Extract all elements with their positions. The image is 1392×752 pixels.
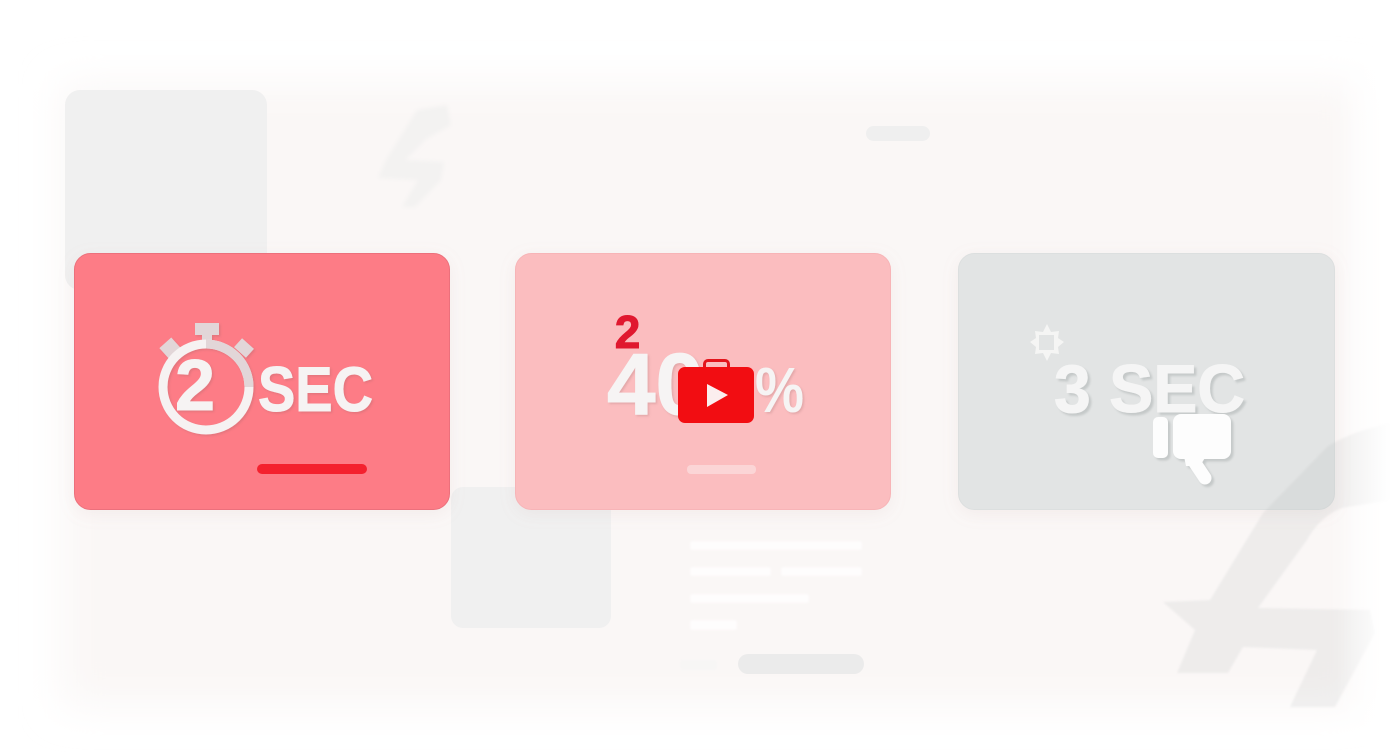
large lightning bolt watermark — [1163, 423, 1392, 707]
faint label stub — [680, 660, 717, 670]
red number 2: 2 — [615, 306, 640, 358]
panel: 3 sec — [958, 254, 1334, 510]
stopwatch number: 2 — [175, 346, 215, 426]
decorative grey block centre — [451, 487, 611, 628]
pale progress bar — [687, 465, 756, 474]
panel: 2 sec — [74, 254, 450, 510]
three sec figure: 3 SEC — [1054, 351, 1245, 427]
icon: briefcase play button — [678, 360, 754, 423]
small lightning bolt icon — [378, 105, 451, 207]
icon: stopwatch — [159, 323, 254, 430]
small grey pill — [866, 126, 930, 141]
red progress bar — [257, 464, 367, 474]
panel: 40 percent — [516, 254, 890, 510]
decorative grey block top left — [65, 90, 267, 290]
forty figure: 40 — [607, 336, 704, 433]
icon: gear sun — [1030, 324, 1064, 361]
percent sign: % — [755, 354, 804, 426]
right edge fade — [1336, 0, 1392, 752]
sec label: SEC — [258, 355, 373, 425]
placeholder text lines — [690, 541, 862, 630]
grey button pill — [738, 654, 864, 674]
background wash — [62, 84, 1362, 706]
icon: thumbs down — [1153, 414, 1231, 478]
